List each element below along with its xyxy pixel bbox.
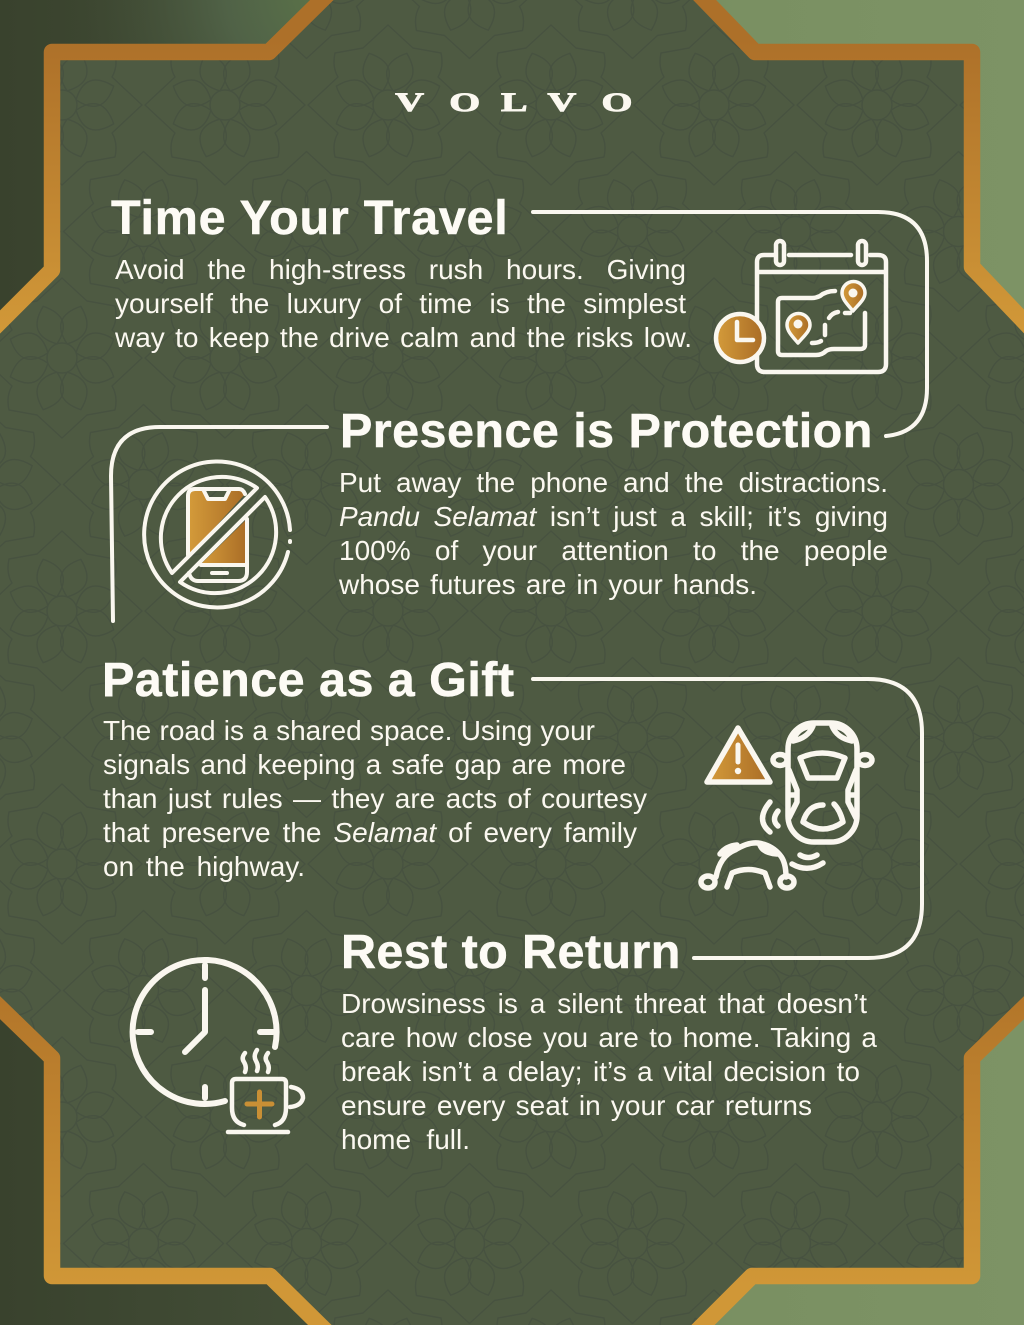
body text: on the highway. <box>103 851 305 882</box>
body text: break isn’t a delay; it’s a vital decision to <box>341 1056 860 1087</box>
heading: Time Your Travel <box>111 190 508 244</box>
section: Patience as a Gift <box>102 652 924 960</box>
body text: care how close you are to home. Taking a <box>341 1022 877 1053</box>
icon: calendar with route map and clock <box>714 238 888 374</box>
body text: 100% of your attention to the people <box>339 535 888 566</box>
section: Time Your Travel <box>111 190 929 438</box>
section: Rest to Return <box>130 924 877 1155</box>
body text: Put away the phone and the distractions. <box>339 467 888 498</box>
body text <box>341 988 877 1155</box>
connector line 2 <box>109 425 329 623</box>
body text: ensure every seat in your car returns <box>341 1090 812 1121</box>
icon: clock and coffee cup <box>130 957 306 1134</box>
heading: Presence is Protection <box>340 404 873 458</box>
body text: way to keep the drive calm and the risks low. <box>115 322 692 353</box>
body text: Pandu Selamat isn’t just a skill; it’s giving <box>339 501 888 532</box>
body text <box>103 715 647 882</box>
body text: that preserve the Selamat of every family <box>103 817 637 848</box>
body text: than just rules — they are acts of courtesy <box>103 783 647 814</box>
logo: VOLVO wordmark: VOLVO <box>395 88 632 117</box>
heading: Rest to Return <box>341 924 681 978</box>
body text: yourself the luxury of time is the simplest <box>115 288 686 319</box>
body text: whose futures are in your hands. <box>339 569 757 600</box>
body text: signals and keeping a safe gap are more <box>103 749 626 780</box>
body text: The road is a shared space. Using your <box>103 715 595 746</box>
icon: cars with warning and sensors <box>698 720 875 891</box>
body text: Avoid the high-stress rush hours. Giving <box>115 254 686 285</box>
connector line 1 <box>531 210 929 438</box>
section: Presence is Protection <box>109 404 888 623</box>
icon: no phone <box>142 460 292 610</box>
connector line 3 <box>531 677 924 960</box>
heading: Patience as a Gift <box>102 652 514 706</box>
body text: Drowsiness is a silent threat that doesn’t <box>341 988 867 1019</box>
body text <box>115 254 692 353</box>
body text <box>339 467 888 600</box>
body text: home full. <box>341 1124 470 1155</box>
